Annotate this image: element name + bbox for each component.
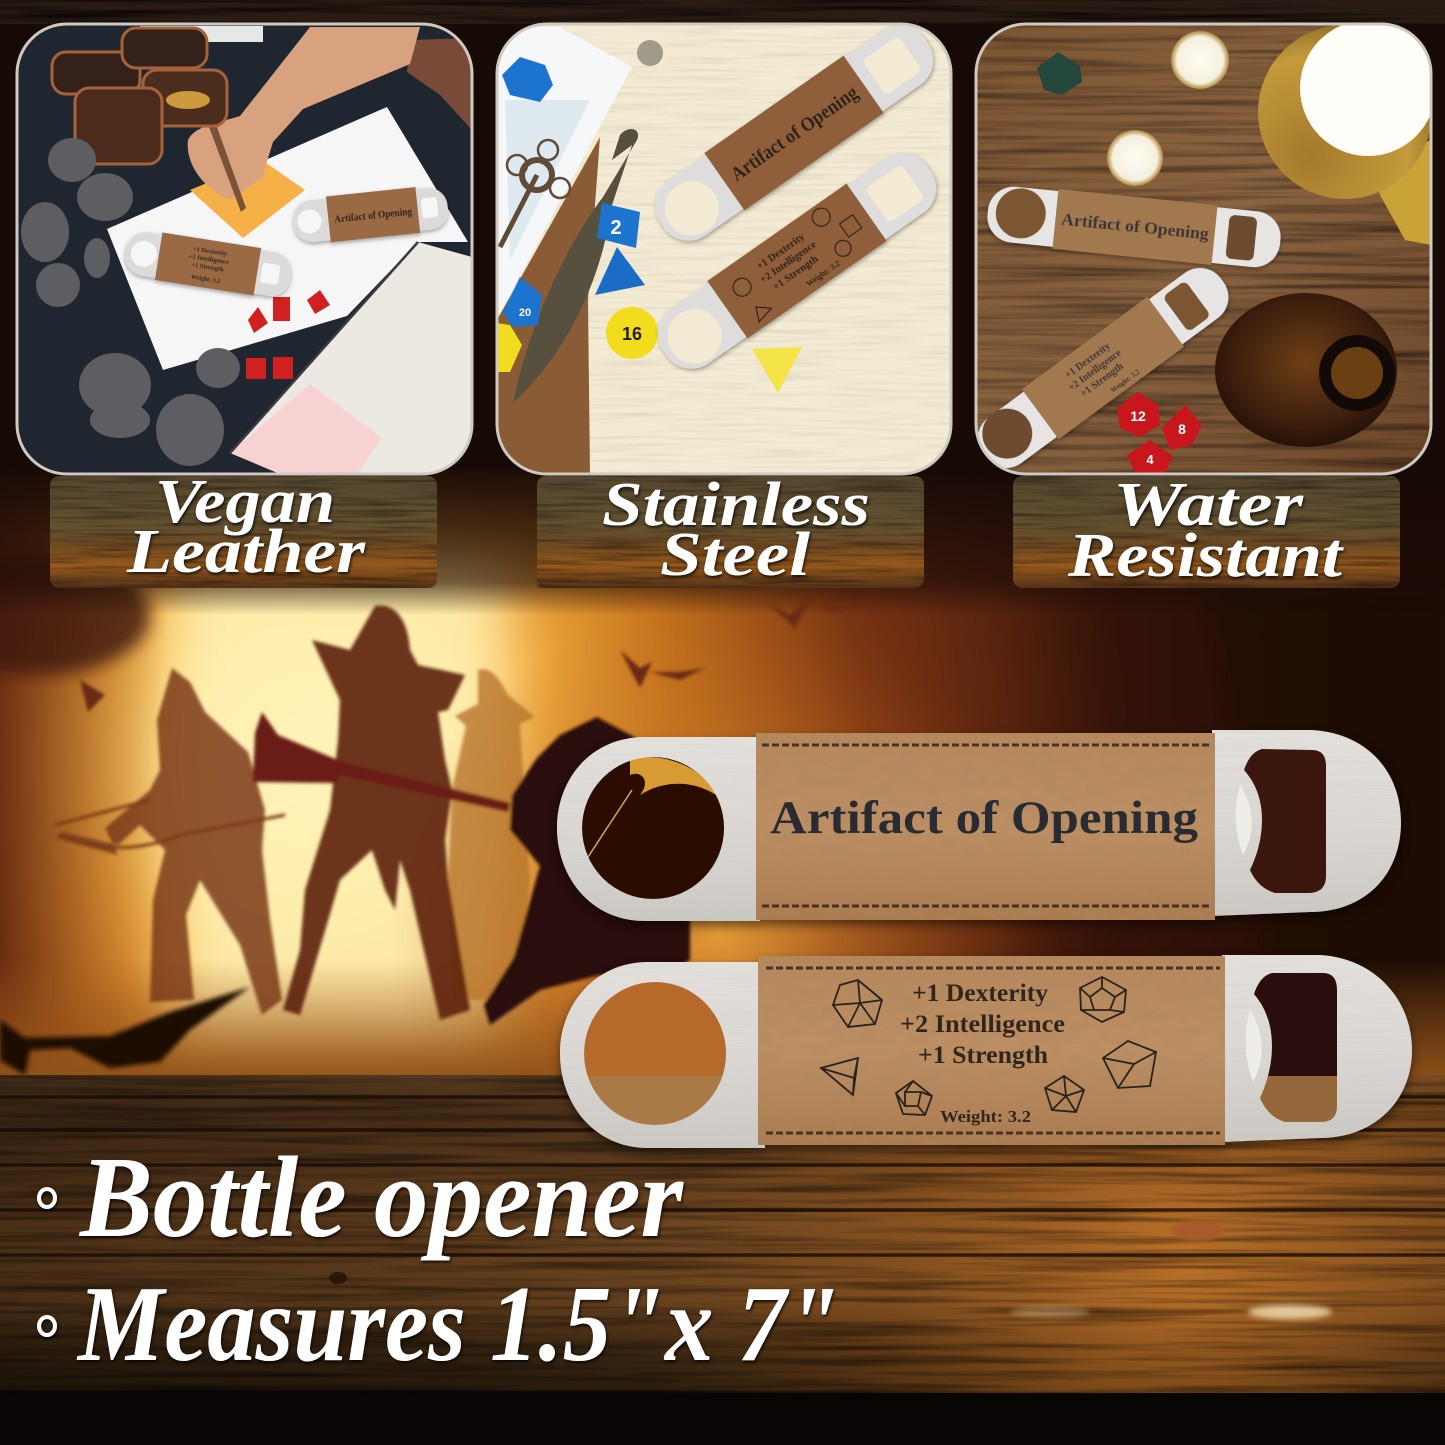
red dice: 4	[1146, 452, 1154, 467]
opener: stats: +1 Strength	[1079, 361, 1126, 400]
green die	[1037, 52, 1082, 95]
opener: stats: +1 Dexterity	[1063, 341, 1113, 381]
dice engravings	[821, 977, 1156, 1115]
metal end: left	[560, 962, 765, 1148]
beer bottle	[1215, 293, 1397, 447]
label: water resistant: Water	[1113, 471, 1304, 539]
key	[500, 140, 570, 247]
panel: vegan leather photo	[17, 24, 472, 474]
miniature figures	[21, 138, 240, 466]
opener: plain	[654, 26, 937, 245]
label: stainless steel: Stainless	[602, 471, 870, 539]
bottle opener: stats face	[560, 955, 1412, 1148]
notepad grid	[505, 100, 590, 260]
opening view: hole interior	[583, 980, 727, 1126]
label: stainless steel: Steel	[660, 521, 811, 589]
label: water resistant	[1013, 471, 1400, 590]
panel: stainless steel photo	[497, 12, 951, 474]
metal end: right	[1212, 730, 1401, 916]
silhouette: bow string	[55, 800, 285, 848]
bottle caps	[1107, 31, 1229, 186]
yellow sticky note	[190, 160, 305, 238]
mini opener: stats: Weight: 3.2	[191, 275, 220, 285]
silhouette: bats	[80, 596, 855, 712]
opener: plain: Artifact of Opening	[1060, 210, 1210, 243]
pink note	[230, 384, 382, 474]
blue and yellow dice: 16	[622, 324, 642, 344]
mini opener: plain	[291, 184, 450, 246]
engraved title: Artifact of Opening	[770, 792, 1199, 844]
mini opener: stats: +1 Dexterity	[192, 245, 228, 258]
feature: measures: Measures 1.5"x 7"	[76, 1265, 840, 1384]
background: fantasy battle scene	[0, 0, 1445, 1090]
tab highlight	[1246, 1010, 1262, 1082]
opener: stats: Weight: 3.2	[1109, 368, 1142, 395]
gold coins	[166, 91, 210, 109]
blue and yellow dice: 20	[519, 307, 531, 319]
opening view: slot interior	[1250, 970, 1340, 1124]
opener: stats	[656, 152, 940, 373]
leather sleeve	[756, 733, 1215, 920]
notepad	[497, 27, 632, 313]
silhouette: armored fighter	[484, 717, 690, 1025]
metal end: left	[557, 737, 760, 921]
wooden board	[497, 137, 600, 474]
feature: bottle opener: Bottle opener	[78, 1134, 684, 1262]
label: vegan leather	[50, 468, 437, 588]
silhouette: archer	[55, 668, 282, 1015]
opener: plain: Artifact of Opening	[727, 82, 862, 186]
label: vegan leather: Vegan	[155, 468, 335, 536]
engraved stats: +1 Dexterity	[912, 980, 1049, 1007]
engraved stats: +1 Strength	[918, 1042, 1048, 1069]
mini opener: stats: +1 Strength	[191, 261, 225, 274]
label: vegan leather: Leather	[126, 518, 366, 586]
opener: stats: +2 Intelligence	[758, 239, 819, 286]
pencil	[209, 127, 246, 212]
silhouette: dragon branch	[0, 987, 250, 1075]
panel border: stainless steel	[497, 24, 951, 474]
opener: stats: +2 Intelligence	[1067, 347, 1124, 394]
leather sleeve	[758, 956, 1225, 1145]
mini opener: stats	[122, 227, 295, 301]
book edge	[230, 242, 418, 453]
illustration: silhouetted adventurers	[0, 596, 855, 1075]
blue and yellow dice	[497, 57, 802, 393]
white sliver	[140, 26, 263, 42]
label: water resistant: Resistant	[1067, 522, 1344, 590]
beer mug	[1258, 20, 1436, 245]
opening view: hole interior	[581, 756, 725, 900]
stitching	[766, 968, 1220, 1133]
label: stainless steel	[537, 471, 924, 589]
blue and yellow dice: 2	[610, 217, 622, 239]
opener: stats: +1 Dexterity	[755, 231, 808, 273]
open book	[230, 242, 472, 474]
bullet: bottle opener	[39, 1189, 55, 1207]
table: wooden planks	[0, 1075, 1445, 1445]
arm	[188, 27, 420, 200]
silhouette: warrior	[283, 605, 470, 1020]
engraved stats: Weight: 3.2	[940, 1107, 1031, 1126]
panel border: water resistant	[976, 24, 1431, 474]
feature list	[39, 1134, 840, 1384]
mini opener: plain: Artifact of Opening	[334, 207, 413, 226]
red dice: 12	[1130, 408, 1146, 424]
red dice	[1117, 392, 1202, 473]
panel border: vegan leather	[17, 24, 472, 474]
opener: stats	[965, 255, 1241, 481]
opener: stats: Weight: 3.2	[804, 259, 842, 289]
engraved stats: +2 Intelligence	[900, 1011, 1065, 1038]
opener: plain	[985, 182, 1283, 272]
opening view: slot interior	[1240, 746, 1330, 896]
stitching	[762, 745, 1210, 906]
bottle opener: Artifact of Opening face	[557, 730, 1401, 921]
wood knot	[637, 40, 663, 66]
red dice: 8	[1178, 421, 1186, 437]
second hand	[407, 38, 472, 130]
metal end: right	[1222, 955, 1412, 1142]
engraved stats	[900, 980, 1065, 1126]
panel: water resistant photo	[965, 20, 1436, 481]
mini opener: stats: +2 Intelligence	[188, 253, 229, 266]
dice pouches	[52, 28, 227, 164]
silhouette: wizard	[448, 669, 535, 1000]
red dice	[246, 290, 330, 379]
opener: stats: +1 Strength	[771, 254, 821, 293]
bullet: measures	[39, 1317, 55, 1335]
paper sheet	[107, 107, 468, 370]
tab highlight	[1236, 785, 1252, 855]
silhouette: axe	[253, 712, 510, 812]
feather bookmark	[513, 129, 638, 403]
